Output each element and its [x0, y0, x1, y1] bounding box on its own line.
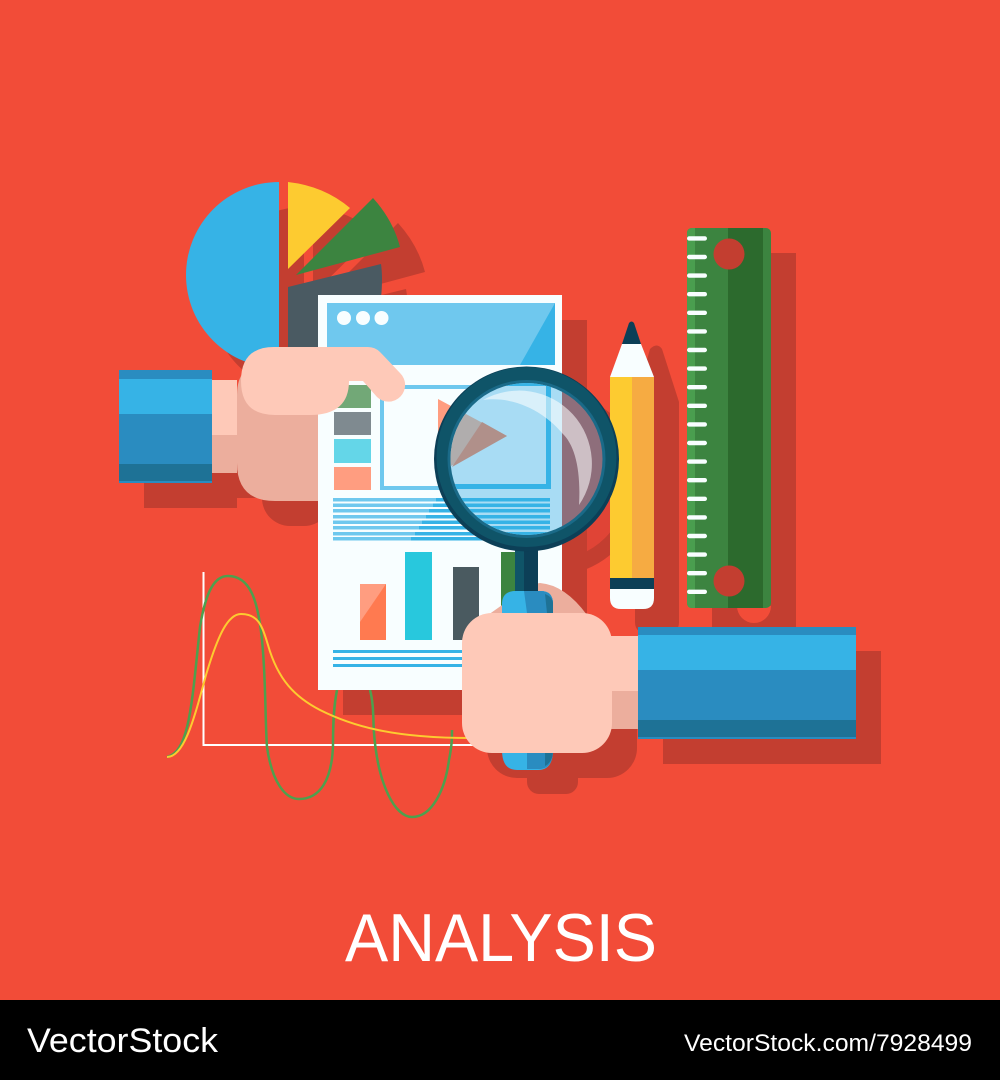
pie slice: dark — [288, 264, 382, 350]
footer bar — [0, 1000, 1000, 1080]
finger — [241, 347, 405, 415]
glass highlight — [483, 391, 592, 505]
video frame — [382, 387, 551, 488]
swatches — [334, 385, 371, 490]
yellow curve — [167, 614, 470, 757]
paper — [318, 295, 562, 690]
panel: document — [318, 295, 562, 690]
drop shadows — [144, 207, 881, 794]
title: ANALYSIS — [345, 900, 657, 976]
header dots — [337, 311, 388, 325]
right hand — [462, 613, 856, 753]
ruler ticks — [687, 236, 707, 594]
browser header — [327, 303, 555, 365]
rim — [434, 366, 619, 552]
icon: pencil — [610, 322, 654, 609]
icon: ruler — [687, 228, 771, 608]
back fingers — [488, 583, 587, 615]
bar chart — [360, 552, 531, 640]
sleeve — [119, 370, 212, 483]
chart: pie — [186, 182, 400, 368]
handle lower grip — [502, 591, 553, 770]
wrist — [611, 636, 638, 691]
footer url: VectorStock.com/7928499 — [684, 1030, 972, 1057]
lower text lines — [333, 650, 473, 667]
sleeve — [638, 627, 856, 739]
pie slice: green — [296, 198, 400, 275]
handle grip top — [502, 591, 553, 613]
left hand — [119, 347, 405, 501]
glass contents — [450, 383, 602, 535]
play triangle — [438, 399, 507, 473]
pie slice: yellow — [288, 182, 350, 269]
axes — [204, 572, 480, 745]
wrist — [212, 380, 237, 435]
green curve left — [167, 576, 337, 799]
green curve right — [370, 690, 452, 817]
palm — [237, 362, 318, 501]
right hand back — [488, 583, 587, 770]
chart: curves and axes — [167, 572, 480, 817]
pie slice: blue — [186, 182, 279, 368]
handle neck — [515, 548, 538, 593]
palm — [462, 613, 612, 753]
icon: magnifying glass — [434, 366, 619, 593]
text line darker parts — [411, 498, 550, 540]
footer logo: VectorStock — [27, 1022, 219, 1060]
text lines — [333, 498, 550, 540]
